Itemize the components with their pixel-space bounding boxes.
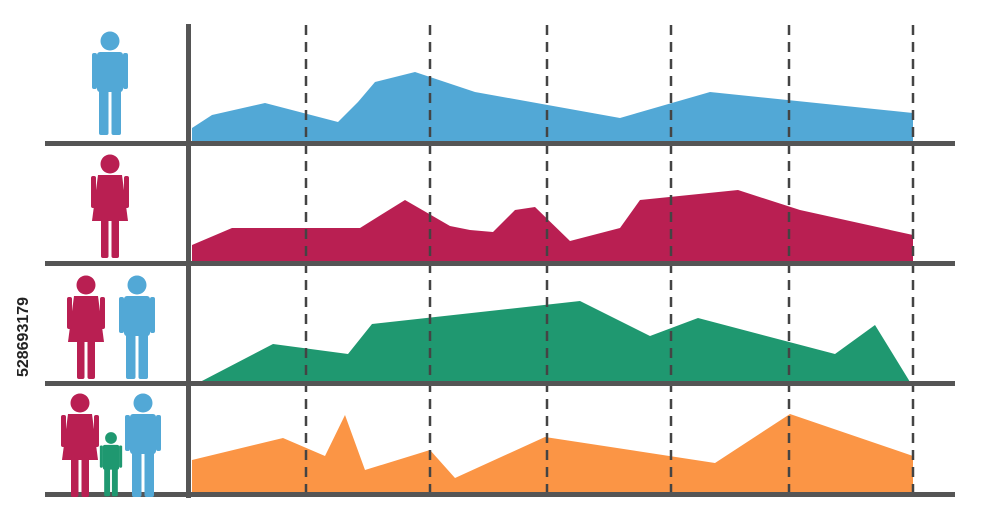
icon: woman bbox=[91, 154, 129, 258]
area chart: blue row bbox=[192, 72, 913, 142]
id text: 528693179 bbox=[15, 297, 32, 377]
icon: family bbox=[61, 394, 161, 497]
icon: man bbox=[92, 32, 128, 135]
area chart: green row bbox=[200, 301, 910, 382]
area chart: orange row bbox=[192, 414, 913, 493]
icon: couple bbox=[67, 276, 155, 379]
dashed gridlines bbox=[306, 25, 913, 495]
area chart: red row bbox=[192, 190, 913, 262]
